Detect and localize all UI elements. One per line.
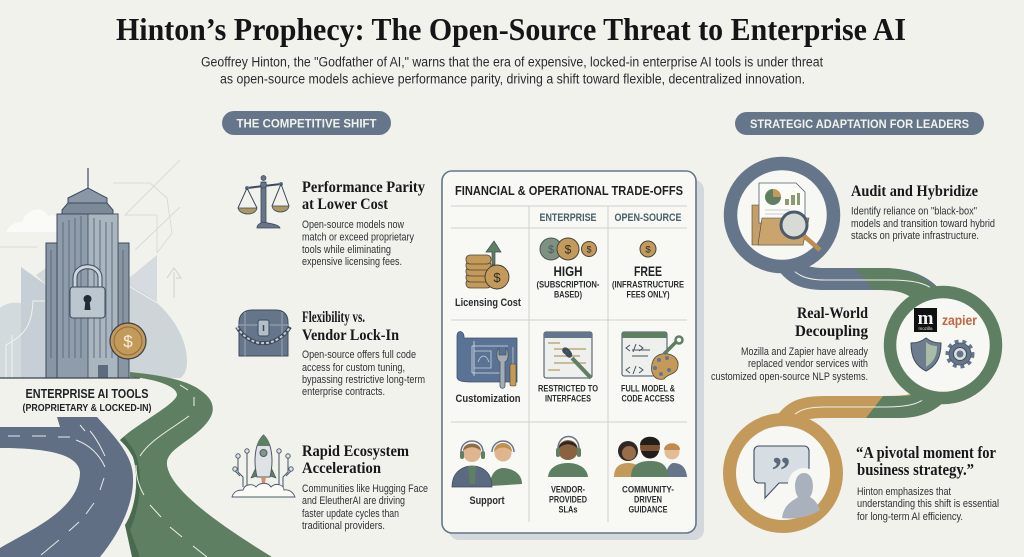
cell: open-source cost free: FREE [634, 263, 662, 279]
text: flexibility vs vendor lock-in: enterprise contracts. [302, 386, 385, 398]
text: pivotal moment quote: “A pivotal moment for [856, 443, 996, 462]
text: real-world decoupling: Decoupling [795, 323, 868, 340]
icon: chained chest [237, 310, 290, 356]
icon: shield [911, 338, 941, 371]
cell: open-source cost free: $ [645, 244, 651, 256]
cell: enterprise cost high: HIGH [554, 263, 582, 279]
icon: dollar coin [110, 323, 146, 359]
logo: mozilla: mozilla [918, 326, 933, 331]
cell: open-source support community: GUIDANCE [628, 504, 668, 516]
text: rapid ecosystem acceleration: Rapid Ecosystem [302, 443, 410, 460]
heading: strategic adaptation for leaders: STRATEGIC ADAPTATION FOR LEADERS [750, 117, 969, 131]
heading: the competitive shift [222, 111, 391, 135]
cell: enterprise cost high: $ [565, 242, 572, 256]
cell: enterprise support vendor slas [548, 436, 588, 516]
text: real-world decoupling [711, 305, 868, 383]
illustration: enterprise tower and diverging roads [0, 160, 272, 557]
text: performance parity [302, 179, 425, 268]
text: audit and hybridize: models and transition toward hybrid [851, 218, 995, 230]
icon: gear [948, 342, 972, 366]
cell: enterprise cost high [536, 238, 600, 300]
row: licensing cost: $ [493, 270, 501, 285]
subtitle: Geoffrey Hinton, the "Godfather of AI," warns that the era of expensive, locked-in enterprise AI tools is under threat [201, 54, 823, 70]
panel: financial and operational trade-offs [442, 171, 704, 540]
text: real-world decoupling: Mozilla and Zapier have already [741, 346, 868, 358]
cell: enterprise customization restricted: INTERFACES [545, 394, 591, 404]
cell: open-source cost free: FEES ONLY) [626, 290, 670, 300]
text: pivotal moment quote: for long-term AI efficiency. [857, 511, 963, 523]
subtitle [201, 54, 823, 86]
text: pivotal moment quote: Hinton emphasizes that [857, 486, 951, 498]
text: audit and hybridize [851, 183, 995, 242]
cell: open-source cost free: (INFRASTRUCTURE [612, 280, 684, 290]
cell: open-source cost free [612, 241, 684, 300]
cell: enterprise cost high: (SUBSCRIPTION- [536, 280, 600, 290]
text: flexibility vs vendor lock-in [302, 309, 425, 398]
text: pivotal moment quote: understanding this shift is essential [857, 498, 999, 510]
label: enterprise ai tools: ENTERPRISE AI TOOLS [26, 386, 149, 401]
column header: enterprise: ENTERPRISE [540, 212, 596, 224]
panel: competitive shift items [232, 176, 428, 532]
cell: open-source support community [614, 437, 687, 516]
tower [46, 168, 129, 378]
cell: enterprise cost high: BASED) [554, 290, 582, 300]
cell: enterprise support vendor slas: PROVIDED [549, 494, 587, 506]
padlock [70, 267, 105, 318]
cell: enterprise support vendor slas: SLAs [558, 504, 578, 516]
text: rapid ecosystem acceleration: traditional providers. [302, 520, 385, 532]
cell: enterprise customization restricted [538, 332, 598, 404]
connector: decoupling to quote [786, 385, 950, 425]
text: rapid ecosystem acceleration: and EleutherAI are driving [302, 495, 405, 507]
cell: open-source customization full access [621, 332, 682, 404]
row: support: Support [470, 495, 505, 507]
logo: mozilla: m [918, 308, 934, 329]
road: proprietary grey [0, 417, 133, 557]
icon: rocket launch [232, 435, 295, 497]
circle: audit [730, 164, 834, 266]
cell: open-source support community: COMMUNITY- [622, 484, 674, 496]
text: rapid ecosystem acceleration: faster update cycles than [302, 508, 399, 520]
text: flexibility vs vendor lock-in: Flexibility vs. [302, 309, 365, 326]
text: performance parity: at Lower Cost [302, 196, 389, 213]
circle: pivotal quote: ” [772, 450, 790, 492]
cell: enterprise cost high: $ [548, 244, 554, 256]
cell: enterprise cost high: $ [586, 244, 592, 254]
row: licensing cost [455, 241, 521, 309]
heading: strategic adaptation for leaders [735, 112, 984, 135]
text: rapid ecosystem acceleration [302, 443, 428, 532]
text: flexibility vs vendor lock-in: bypassing restrictive long-term [302, 374, 425, 386]
panel title: FINANCIAL & OPERATIONAL TRADE-OFFS [455, 183, 683, 198]
road: open-source green [120, 372, 272, 557]
text: rapid ecosystem acceleration: Communities like Hugging Face [302, 483, 428, 495]
text: performance parity: Performance Parity [302, 179, 425, 196]
text: flexibility vs vendor lock-in: access for custom tuning, [302, 362, 405, 374]
icon: balance scale [238, 176, 289, 228]
text: audit and hybridize: Audit and Hybridize [851, 183, 978, 200]
row: customization: Customization [456, 393, 521, 405]
row: licensing cost: Licensing Cost [455, 297, 521, 309]
cell: open-source customization full access: FULL MODEL & [621, 384, 675, 394]
text: performance parity: tools while eliminating [302, 244, 391, 256]
row: support [452, 441, 522, 507]
subtitle: as open-source models achieve performance parity, driving a shift toward flexible, decentralized innovation. [220, 72, 805, 86]
logo: mozilla [914, 308, 937, 332]
panel: strategic path [711, 164, 999, 526]
text: flexibility vs vendor lock-in: Vendor Lock-In [302, 327, 399, 344]
icon: dollar coin: $ [123, 332, 133, 351]
text: flexibility vs vendor lock-in: Open-source offers full code [302, 349, 416, 361]
connector: audit to decoupling [785, 261, 938, 300]
title: Hinton’s Prophecy: The Open-Source Threat to Enterprise AI [116, 11, 906, 47]
heading: the competitive shift: THE COMPETITIVE SHIFT [236, 116, 377, 130]
label: enterprise ai tools: (PROPRIETARY & LOCKED-IN) [22, 402, 152, 414]
column header: open-source: OPEN-SOURCE [614, 212, 682, 224]
text: audit and hybridize: Identify reliance on "black-box" [851, 206, 977, 218]
label: enterprise ai tools [22, 386, 152, 414]
text: rapid ecosystem acceleration: Acceleration [302, 460, 381, 477]
circle: pivotal quote [730, 420, 836, 526]
circle: decoupling [890, 292, 996, 398]
row: customization [456, 332, 521, 405]
text: real-world decoupling: replaced vendor services with [748, 358, 868, 370]
text: pivotal moment quote [856, 443, 999, 523]
text: performance parity: expensive licensing fees. [302, 256, 402, 268]
text: performance parity: match or exceed proprietary [302, 232, 414, 244]
text: performance parity: Open-source models now [302, 219, 404, 231]
cell: open-source support community: DRIVEN [634, 494, 662, 506]
cell: open-source customization full access: CODE ACCESS [622, 394, 674, 404]
text: audit and hybridize: stacks on private infrastructure. [851, 230, 979, 242]
logo: zapier: zapier [942, 312, 977, 328]
text: real-world decoupling: Real-World [797, 305, 868, 322]
cell: enterprise customization restricted: RESTRICTED TO [538, 384, 598, 394]
text: real-world decoupling: customized open-source NLP systems. [711, 371, 868, 383]
text: pivotal moment quote: business strategy.” [857, 460, 974, 479]
cell: enterprise support vendor slas: VENDOR- [551, 484, 585, 496]
